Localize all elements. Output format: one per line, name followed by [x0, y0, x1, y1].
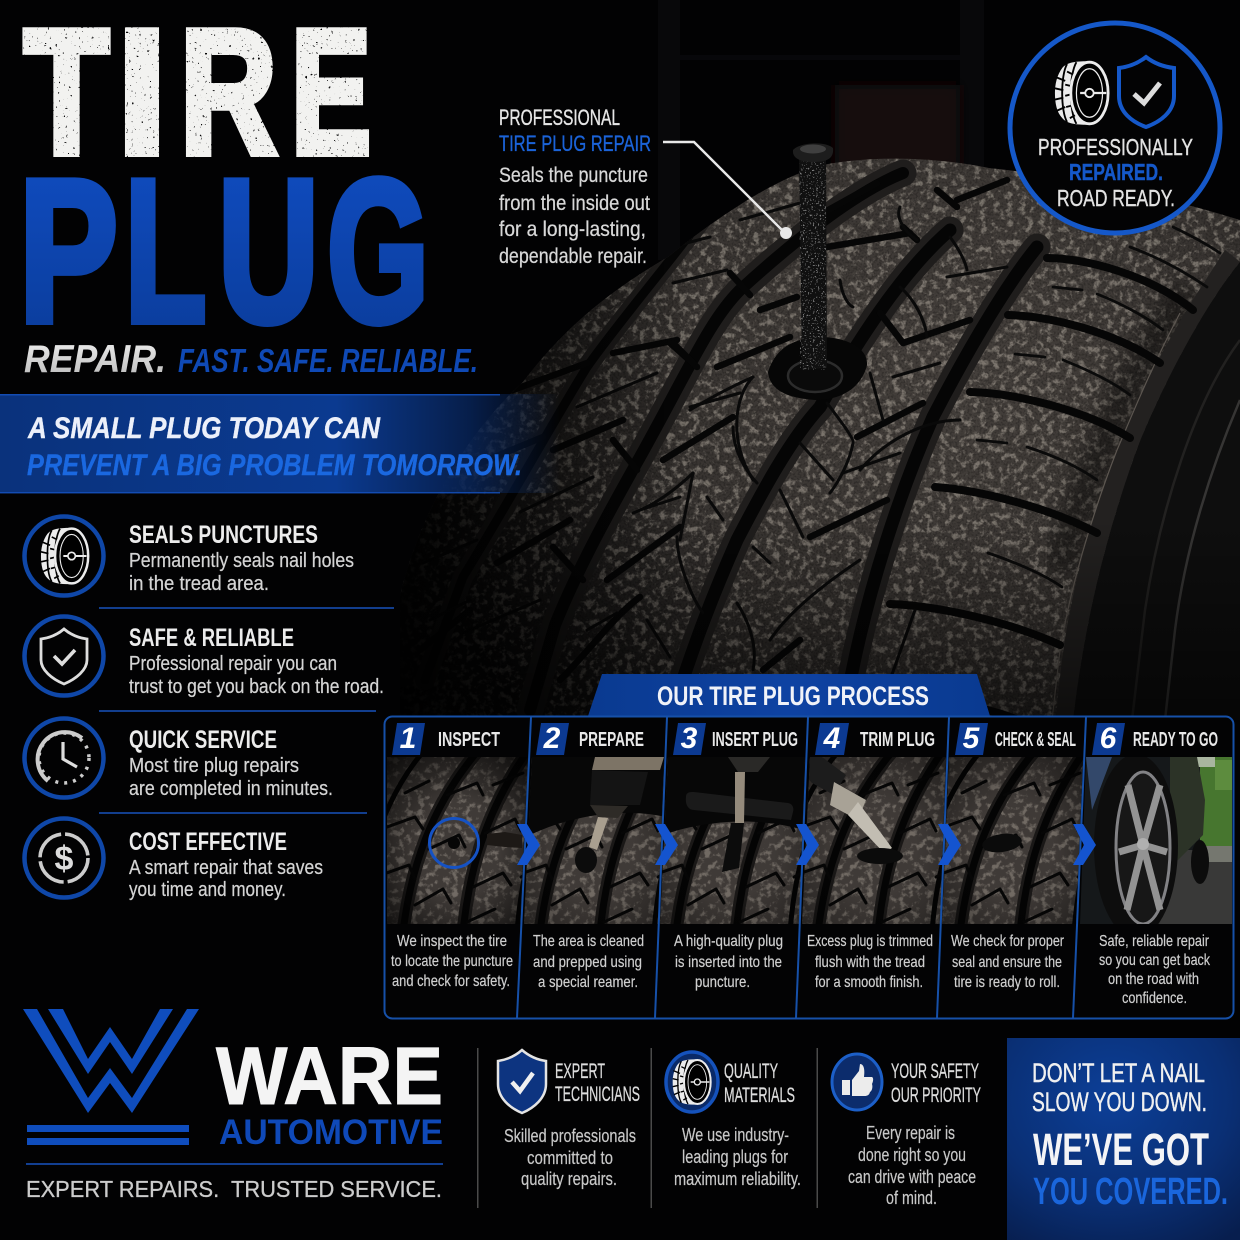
step 5 photo — [942, 757, 1083, 924]
call to action — [1007, 1038, 1240, 1240]
subtitle: FAST. SAFE. RELIABLE. — [178, 342, 478, 379]
benefit: expert technicians — [498, 1050, 640, 1189]
step 6: ready to go: confidence. — [1122, 990, 1187, 1007]
step 4: trim plug: Excess plug is trimmed — [807, 933, 933, 950]
banner — [0, 394, 560, 494]
icon: tire — [1055, 61, 1108, 125]
step 4: trim plug: for a smooth finish. — [815, 974, 923, 991]
shoulder slits — [977, 227, 1220, 587]
step 4 number — [815, 722, 849, 755]
badge text: PROFESSIONALLY — [1038, 134, 1193, 160]
feature: safe and reliable: Professional repair you can — [129, 653, 337, 675]
step 5 number — [955, 722, 988, 755]
logo mark — [23, 1009, 199, 1145]
feature: seals punctures: in the tread area. — [129, 573, 269, 595]
callout body: for a long-lasting, — [499, 218, 646, 241]
step 3 photo — [660, 757, 805, 924]
feature: seals punctures: SEALS PUNCTURES — [129, 521, 318, 549]
sidewall — [1073, 262, 1240, 720]
step 3: insert plug: INSERT PLUG — [712, 729, 798, 751]
step 5: check and seal: seal and ensure the — [952, 954, 1062, 971]
benefit: your safety our priority: YOUR SAFETY — [891, 1060, 979, 1083]
tire plug in tread — [768, 143, 867, 400]
feature: cost effective — [24, 818, 323, 901]
benefit: your safety our priority: OUR PRIORITY — [891, 1084, 981, 1107]
feature: safe and reliable: trust to get you back on the road. — [129, 676, 384, 698]
step 5: check and seal: CHECK & SEAL — [995, 729, 1076, 751]
step 1: inspect: and check for safety. — [392, 973, 510, 990]
main grooves — [496, 167, 1044, 674]
bottom fade — [438, 544, 1186, 716]
step 6: ready to go — [1080, 722, 1233, 1007]
feature: seals punctures — [24, 516, 354, 596]
step 4: trim plug: flush with the tread — [815, 954, 925, 971]
step 1: inspect — [387, 723, 528, 990]
subtitle — [24, 338, 478, 381]
title: PLUG: G — [327, 138, 429, 365]
feature list — [24, 516, 394, 901]
step 2: prepare: PREPARE — [579, 729, 644, 751]
step 2 photo — [524, 757, 664, 924]
title: PLUG — [19, 138, 429, 365]
feature: cost effective: A smart repair that saves — [129, 857, 323, 879]
step 3 number — [673, 722, 706, 755]
callout heading — [499, 105, 651, 156]
benefit: your safety our priority — [832, 1054, 981, 1208]
feature: seals punctures: Permanently seals nail holes — [129, 550, 354, 572]
benefit: expert technicians: quality repairs. — [521, 1169, 617, 1189]
title: PLUG: L — [125, 138, 207, 365]
benefit: expert technicians: committed to — [527, 1148, 613, 1168]
icon: dollar coin: $ — [55, 840, 74, 878]
step 6: ready to go: on the road with — [1108, 971, 1199, 988]
title — [19, 0, 478, 381]
logo: ware automotive — [23, 1009, 443, 1202]
step 6 number — [1092, 722, 1125, 755]
arrows between steps — [517, 824, 1096, 865]
step 3 number: 3 — [681, 722, 698, 755]
benefit: expert technicians: TECHNICIANS — [555, 1083, 640, 1106]
badge text: REPAIRED. — [1069, 159, 1163, 185]
benefit: your safety our priority: Every repair is — [866, 1123, 955, 1143]
tire photo — [400, 150, 1240, 725]
process heading tab — [588, 674, 990, 716]
step 6: ready to go: so you can get back — [1099, 952, 1211, 969]
logo: ware automotive: AUTOMOTIVE — [219, 1113, 443, 1152]
process heading tab: OUR TIRE PLUG PROCESS — [657, 681, 929, 711]
step 3: insert plug — [660, 723, 805, 991]
step 5: check and seal — [942, 723, 1083, 991]
step 3: insert plug: is inserted into the — [675, 954, 782, 971]
icon: thumbs up — [832, 1054, 882, 1110]
benefit: quality materials: maximum reliability. — [674, 1169, 801, 1189]
benefit: quality materials: leading plugs for — [682, 1147, 788, 1167]
title: PLUG: P — [19, 138, 118, 365]
benefit: your safety our priority: done right so you — [858, 1145, 966, 1165]
feature: quick service: are completed in minutes. — [129, 778, 333, 800]
callout heading: TIRE PLUG REPAIR — [499, 131, 651, 156]
groove walls — [425, 173, 1037, 710]
feature: quick service: Most tire plug repairs — [129, 755, 299, 777]
step 5: check and seal: tire is ready to roll. — [954, 974, 1060, 991]
badge: professionally repaired — [1010, 23, 1220, 233]
step 4 number: 4 — [823, 722, 841, 755]
step 1 number: 1 — [400, 722, 416, 755]
icon: tire — [24, 516, 104, 596]
callout body: from the inside out — [499, 192, 650, 215]
benefit: your safety our priority: of mind. — [886, 1188, 937, 1208]
inspect ring — [430, 818, 478, 868]
step 2 number — [536, 722, 569, 755]
icon: clock — [24, 718, 104, 798]
benefit: quality materials — [666, 1052, 801, 1189]
benefit: quality materials: MATERIALS — [724, 1084, 795, 1107]
banner line 1: A SMALL PLUG TODAY CAN — [27, 412, 381, 445]
step 1: inspect: INSPECT — [438, 729, 500, 751]
step 2 number: 2 — [543, 722, 561, 755]
shoulder band — [1056, 250, 1240, 720]
step 1: inspect: to locate the puncture — [391, 953, 513, 970]
process panel — [363, 674, 1234, 1018]
step 2: prepare: The area is cleaned — [533, 933, 644, 950]
step 1 number — [392, 722, 425, 755]
left fade — [400, 272, 672, 716]
subtitle: REPAIR. — [24, 338, 166, 381]
benefit: quality materials: We use industry- — [682, 1125, 789, 1145]
step 6: ready to go: Safe, reliable repair — [1099, 933, 1210, 950]
feature: safe and reliable: SAFE & RELIABLE — [129, 624, 294, 652]
step 2: prepare — [524, 723, 664, 991]
step 6 photo: car wheel — [1080, 754, 1233, 938]
feature: quick service — [24, 718, 333, 800]
callout heading: PROFESSIONAL — [499, 105, 620, 130]
step 3: insert plug: A high-quality plug — [674, 933, 783, 950]
icon: shield — [1119, 57, 1174, 127]
title: PLUG: U — [218, 138, 319, 365]
thin tread sipes — [423, 203, 1007, 680]
feature: safe and reliable — [24, 616, 384, 698]
benefit: quality materials: QUALITY — [724, 1060, 778, 1083]
feature: cost effective: you time and money. — [129, 879, 286, 901]
step 3: insert plug: puncture. — [695, 974, 750, 991]
benefit: expert technicians: EXPERT — [555, 1060, 605, 1083]
callout: professional tire plug repair — [499, 105, 792, 268]
callout body — [499, 164, 650, 268]
icon: dollar coin — [24, 818, 104, 898]
step 5 number: 5 — [963, 722, 981, 755]
leader line — [663, 142, 792, 239]
shoulder transverse grooves — [860, 258, 1193, 725]
logo tagline: EXPERT REPAIRS. TRUSTED SERVICE. — [26, 1176, 442, 1202]
step 4: trim plug — [802, 723, 946, 988]
badge text: ROAD READY. — [1057, 185, 1175, 211]
callout body: dependable repair. — [499, 245, 647, 268]
cta lead — [1032, 1058, 1207, 1117]
benefit: expert technicians: Skilled professionals — [504, 1126, 636, 1146]
feature: cost effective: COST EFFECTIVE — [129, 828, 287, 856]
callout body: Seals the puncture — [499, 164, 648, 187]
step 1 photo — [387, 757, 528, 924]
logo wordmark: WARE — [216, 1031, 443, 1122]
heavy tread cuts — [420, 180, 1007, 680]
title: TIRE — [24, 0, 371, 191]
icon: shield — [24, 616, 104, 696]
icon: shield check — [498, 1050, 546, 1113]
step 5: check and seal: We check for proper — [951, 933, 1065, 950]
step 4 photo — [802, 757, 946, 924]
step 2: prepare: a special reamer. — [538, 974, 638, 991]
step 4: trim plug: TRIM PLUG — [860, 729, 935, 751]
icon: tire — [666, 1052, 718, 1112]
step 2: prepare: and prepped using — [533, 954, 642, 971]
step 1: inspect: We inspect the tire — [397, 933, 507, 950]
badge text — [1038, 134, 1193, 211]
banner line 2: PREVENT A BIG PROBLEM TOMORROW. — [27, 449, 522, 482]
step 6 number: 6 — [1100, 722, 1117, 755]
shading at block ends — [1060, 290, 1190, 570]
benefit: your safety our priority: can drive with peace — [848, 1167, 976, 1187]
feature: quick service: QUICK SERVICE — [129, 726, 277, 754]
